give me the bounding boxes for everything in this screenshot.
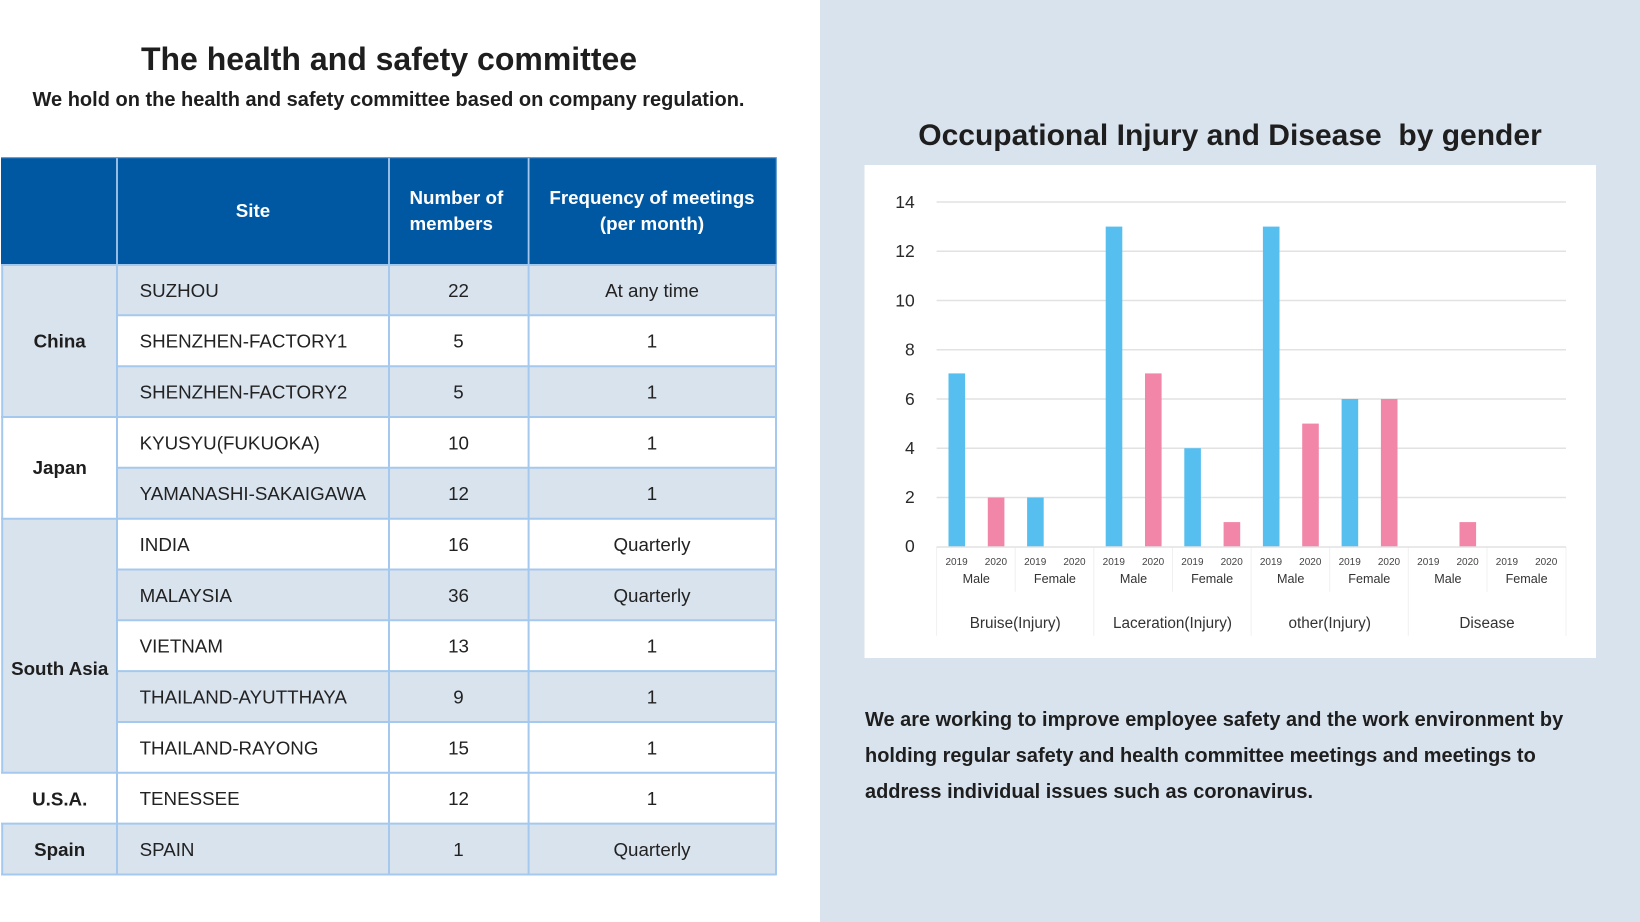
gender labels: Female — [1348, 572, 1390, 586]
panel: right background — [820, 0, 1640, 922]
frequency of meetings: 1 — [647, 382, 657, 402]
region labels: Spain — [34, 839, 85, 860]
frequency of meetings — [605, 280, 699, 860]
y axis labels — [895, 192, 915, 556]
table header — [1, 157, 777, 264]
number of members: 12 — [448, 483, 469, 504]
chart title: Occupational Injury and Disease by gender — [918, 119, 1542, 152]
text block: safety statement: holding regular safety and health committee meetings and meetings to — [865, 745, 1536, 767]
site names: THAILAND-AYUTTHAYA — [140, 686, 347, 707]
number of members: 15 — [448, 737, 469, 758]
frequency of meetings: 1 — [647, 636, 657, 657]
gender labels — [963, 572, 1548, 586]
region labels: Japan — [33, 457, 87, 478]
site names: INDIA — [140, 534, 190, 555]
year labels: 2019 — [1339, 557, 1361, 568]
year labels: 2020 — [1063, 557, 1086, 568]
year labels: 2020 — [1221, 557, 1243, 568]
panel: committee table — [1, 157, 777, 875]
gender labels: Male — [1277, 572, 1304, 586]
site names: THAILAND-RAYONG — [140, 737, 318, 758]
gender labels: Female — [1506, 572, 1548, 586]
site names: SHENZHEN-FACTORY1 — [140, 330, 347, 352]
year labels: 2019 — [1496, 557, 1518, 568]
site names: VIETNAM — [140, 636, 223, 657]
table cell fills — [2, 264, 776, 874]
y axis labels: 0 — [905, 536, 915, 556]
frequency of meetings: 1 — [647, 483, 657, 504]
number of members: 1 — [453, 839, 464, 860]
gender labels: Male — [963, 572, 990, 586]
table header: Number of — [410, 187, 504, 208]
number of members: 16 — [448, 534, 469, 555]
x axis line — [937, 546, 1566, 548]
y axis labels: 8 — [905, 340, 915, 360]
site names: SPAIN — [140, 839, 194, 860]
number of members: 36 — [448, 585, 469, 606]
title: health and safety committee: The health and safety committee — [141, 41, 637, 77]
year labels: 2019 — [945, 557, 968, 568]
site names: KYUSYU(FUKUOKA) — [140, 432, 320, 453]
year labels: 2019 — [1103, 557, 1125, 568]
year labels: 2020 — [985, 557, 1007, 568]
y axis labels: 2 — [905, 487, 915, 507]
gender labels: Female — [1191, 572, 1233, 586]
table header: Frequency of meetings — [549, 187, 755, 208]
text block: safety statement: address individual issues such as coronavirus. — [865, 781, 1313, 803]
site names — [140, 280, 367, 860]
number of members: 22 — [448, 280, 469, 301]
number of members: 5 — [453, 382, 464, 402]
table grid lines — [1, 264, 777, 875]
year labels: 2019 — [1181, 557, 1204, 568]
frequency of meetings: 1 — [647, 330, 657, 352]
number of members: 12 — [448, 788, 469, 809]
number of members: 9 — [453, 686, 464, 707]
year labels: 2020 — [1142, 557, 1165, 568]
region labels: U.S.A. — [32, 788, 87, 809]
y axis labels: 14 — [895, 192, 915, 212]
frequency of meetings: Quarterly — [613, 534, 691, 555]
category labels: Laceration(Injury) — [1113, 615, 1232, 632]
y axis labels: 12 — [895, 241, 915, 261]
frequency of meetings: 1 — [647, 788, 657, 809]
category labels: Disease — [1459, 615, 1515, 632]
year labels: 2020 — [1378, 557, 1401, 568]
category labels — [970, 615, 1515, 632]
year labels: 2019 — [1260, 557, 1283, 568]
number of members: 13 — [448, 636, 469, 657]
table header: members — [410, 213, 493, 234]
site names: SHENZHEN-FACTORY2 — [140, 382, 347, 402]
bars: 2020 — [988, 373, 1476, 547]
text block: safety statement: We are working to improve employee safety and the work environment by — [865, 709, 1563, 731]
table header: (per month) — [600, 213, 704, 234]
region labels: China — [34, 330, 86, 352]
frequency of meetings: At any time — [605, 280, 699, 301]
gender labels: Female — [1034, 572, 1076, 586]
category labels: Bruise(Injury) — [970, 615, 1061, 632]
y axis labels: 4 — [905, 438, 915, 458]
bar chart: injury and disease by gender — [864, 165, 1596, 658]
year labels: 2019 — [1417, 557, 1440, 568]
site names: MALAYSIA — [140, 585, 232, 606]
subtitle: We hold on the health and safety committee based on company regulation. — [33, 89, 744, 111]
frequency of meetings: 1 — [647, 737, 657, 758]
table header: Site — [236, 200, 270, 221]
gender labels: Male — [1434, 572, 1462, 586]
site names: TENESSEE — [140, 788, 240, 809]
frequency of meetings: 1 — [647, 432, 657, 453]
region labels — [11, 330, 109, 860]
number of members: 10 — [448, 432, 469, 453]
y axis labels: 10 — [895, 290, 915, 310]
bars: 2019 — [948, 227, 1358, 547]
year labels: 2020 — [1535, 557, 1558, 568]
year labels: 2020 — [1299, 557, 1322, 568]
frequency of meetings: Quarterly — [613, 585, 691, 606]
site names: SUZHOU — [140, 280, 219, 301]
year labels: 2019 — [1024, 557, 1047, 568]
year labels: 2020 — [1456, 557, 1479, 568]
frequency of meetings: 1 — [647, 686, 657, 707]
y axis labels: 6 — [905, 389, 915, 409]
frequency of meetings: Quarterly — [613, 839, 691, 860]
year labels — [945, 557, 1558, 568]
site names: YAMANASHI-SAKAIGAWA — [140, 483, 367, 504]
region labels: South Asia — [11, 658, 109, 679]
gender labels: Male — [1120, 572, 1147, 586]
number of members — [448, 280, 469, 860]
category labels: other(Injury) — [1288, 615, 1371, 632]
number of members: 5 — [453, 330, 464, 352]
text block: safety statement — [865, 709, 1563, 803]
